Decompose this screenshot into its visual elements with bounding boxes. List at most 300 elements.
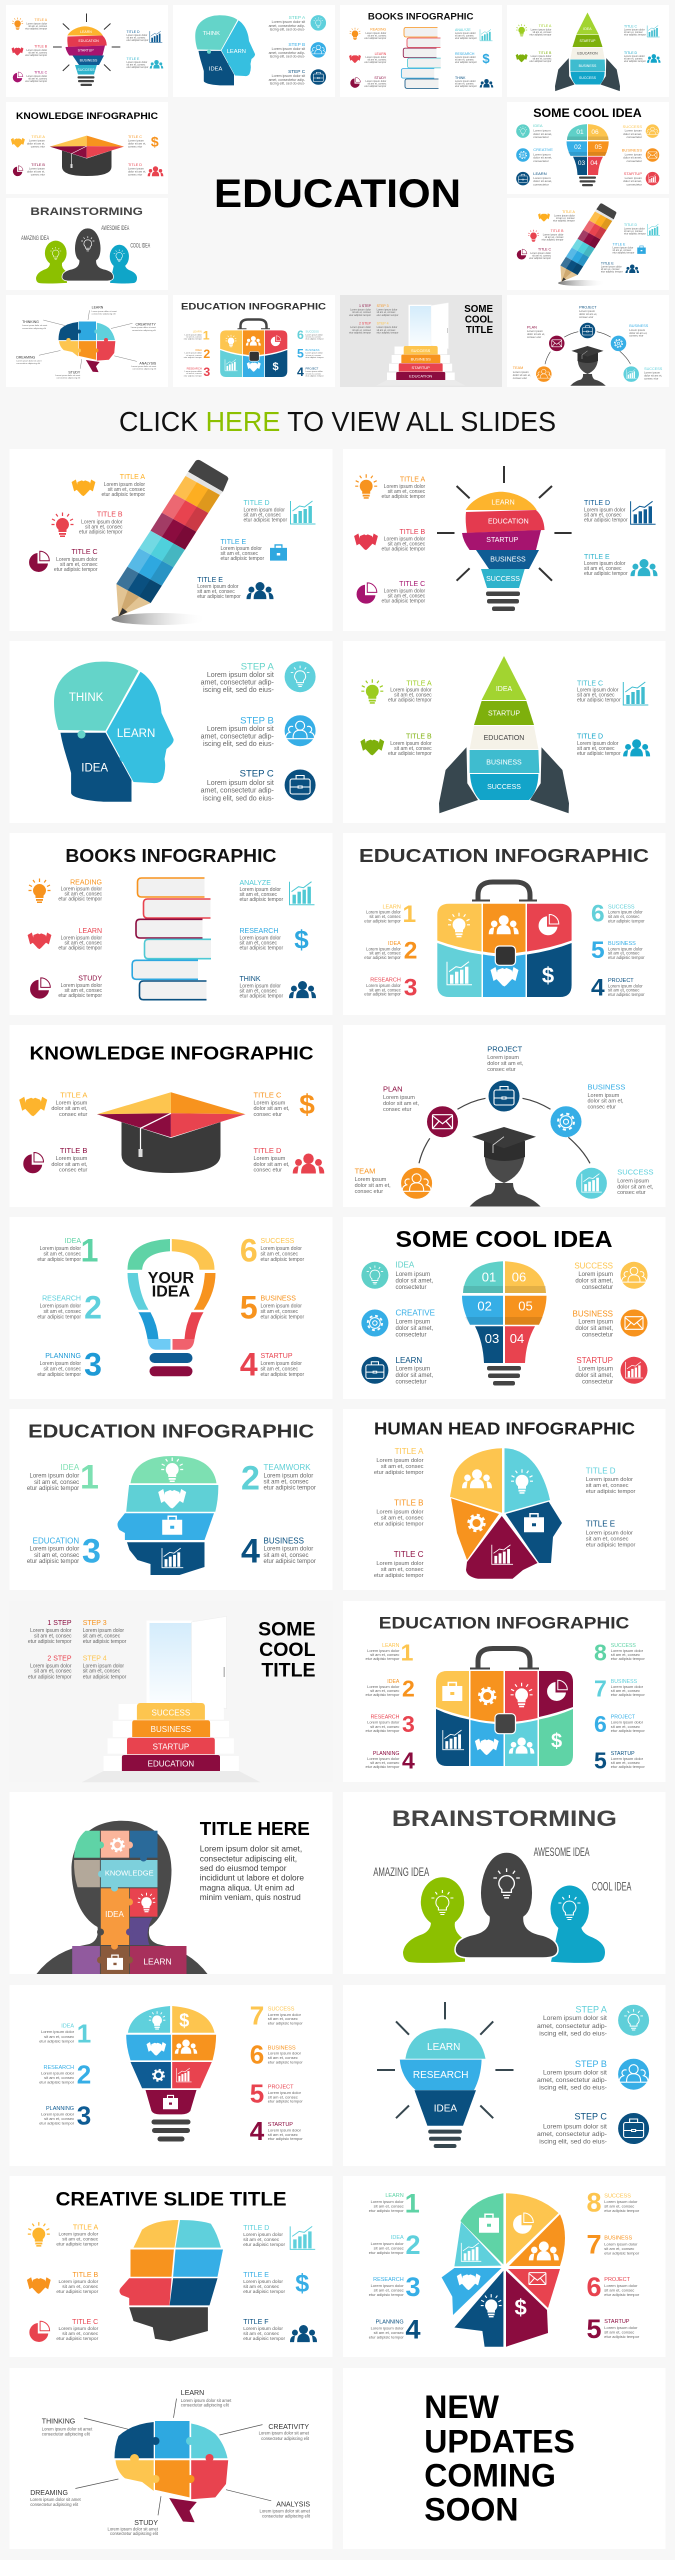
rocket illustration: SUCCESS <box>487 784 521 791</box>
text block: step 4: sit am et, consec <box>83 1669 121 1675</box>
bulb ring illustration <box>128 1239 216 1376</box>
briefcase illustration: $ <box>551 1730 562 1752</box>
text block: title C: sit am et, consec <box>62 2331 99 2337</box>
text block: research 2: RESEARCH <box>42 1296 81 1303</box>
bulb illustration <box>437 466 572 611</box>
text block: title D: Lorem ipsum dolor <box>243 2232 283 2238</box>
text block: success: Lorem ipsum <box>617 1178 649 1184</box>
text block: title D: dolor sit am et, <box>254 1162 290 1168</box>
text block: think: Lorem ipsum dolor <box>240 983 281 989</box>
heading: CREATIVE SLIDE TITLE <box>56 2190 287 2210</box>
panel: books slide <box>10 833 332 1015</box>
numbered bulb illustration: 02 <box>477 1299 492 1314</box>
text block: research 2: 2 <box>77 2060 91 2090</box>
text block: business 5: BUSINESS <box>608 941 636 947</box>
icon: dollar: $ <box>299 1089 315 1120</box>
text block: title E: etur adipisic tempor <box>220 556 264 562</box>
text block: think: etur adipisic tempor <box>240 993 283 999</box>
text block: success: consectetur <box>582 1285 613 1291</box>
text block: thinking: consectetur adipiscing elit <box>42 2432 91 2437</box>
text block: project: Lorem ipsum <box>487 1055 519 1061</box>
icon: bulb <box>52 512 74 537</box>
text block: title A: etur adipisic tempor <box>374 1470 424 1476</box>
text block: idea 2: etur adipisic tempor <box>364 955 401 960</box>
text block: title B: Lorem ipsum dolor <box>376 1510 424 1516</box>
bulb illustration: SUCCESS <box>486 576 520 583</box>
text block: startup 4: etur adipisic tempor <box>268 2136 303 2141</box>
text block: success 7 <box>250 2000 303 2030</box>
text block: title D: sit am et, consec <box>584 512 622 518</box>
segmented head illustration <box>120 2220 223 2341</box>
text block: title C: sit am et, consec <box>577 693 615 699</box>
text block: project 4 <box>591 974 645 1001</box>
connecting arcs <box>419 1098 590 1163</box>
text block: title B: etur adipisic tempor <box>79 530 123 536</box>
puzzle person illustration: IDEA <box>105 1910 124 1919</box>
panel: knowledge slide <box>10 1025 332 1207</box>
text block: title B: etur adipisic tempor <box>388 751 432 757</box>
text block: plan: Lorem ipsum <box>383 1095 415 1101</box>
numbered bulb illustration: 03 <box>485 1331 499 1346</box>
text block: business 7: 7 <box>586 2230 602 2260</box>
text block: research 3 <box>369 2272 421 2302</box>
text block: project 4: etur adipisic tempor <box>608 992 645 997</box>
text block: title D: sit am et, consec <box>243 2237 280 2243</box>
icon: pie chart <box>357 583 377 604</box>
text block: startup 4 <box>250 2116 303 2146</box>
text block: project 6: sit am et, consec <box>604 2287 634 2292</box>
text block: startup: dolor sit amet, <box>575 1373 613 1379</box>
text block: idea 1: 1 <box>77 2018 91 2048</box>
heading: EDUCATION INFOGRAPHIC <box>359 845 649 866</box>
text block: research 3: RESEARCH <box>370 978 401 984</box>
panel: bulb slide <box>343 449 666 631</box>
text block: startup 4: sit am et, consec <box>260 1366 299 1372</box>
thumbnail: bulb slide <box>6 5 168 97</box>
numbered bulb illustration: 05 <box>518 1299 533 1314</box>
panel: brain slide <box>10 2368 332 2549</box>
text block: research 3: sit am et, consec <box>374 2288 404 2292</box>
text block: title B: etur adipisic tempor <box>374 1522 424 1528</box>
text block: title C: Lorem ipsum <box>254 1100 286 1106</box>
text block: study: STUDY <box>134 2520 158 2527</box>
panel: creative slide <box>10 2176 332 2357</box>
panel: some cool idea slide <box>343 1217 666 1399</box>
text block: education 3: 3 <box>82 1533 101 1571</box>
text block: teamwork 2: 2 <box>241 1459 260 1497</box>
text block: title A: etur adipisic tempor <box>56 2242 99 2248</box>
text block: idea 1: 1 <box>81 1232 98 1268</box>
text block: project: PROJECT <box>487 1045 523 1054</box>
text block: step B: STEP B <box>575 2059 607 2069</box>
text block: planning 3: Lorem ipsum dolor <box>40 1361 81 1367</box>
text block: title E: etur adipisic tempor <box>243 2289 285 2295</box>
text block: learn 1: LEARN <box>385 2193 404 2199</box>
text block: business 4 <box>241 1533 316 1571</box>
text block: title D: sit am et, consec <box>244 512 282 518</box>
text block: title E: TITLE E <box>243 2272 269 2279</box>
heading: new updates coming soon: COMING <box>424 2457 556 2493</box>
text block: analyze: ANALYZE <box>240 880 271 887</box>
text block: learn 1: 1 <box>405 2188 420 2218</box>
text block: step B: STEP B <box>240 715 274 726</box>
text block: step 4: Lorem ipsum dolor <box>83 1663 124 1669</box>
label: cool idea: COOL IDEA <box>592 1880 631 1894</box>
text block: idea 2: etur adipisic tempor <box>365 1692 400 1697</box>
text block: idea 1: etur adipisic tempor <box>39 2038 75 2043</box>
text block: project 6: PROJECT <box>604 2277 631 2283</box>
text block: planning 4: Lorem ipsum dolor <box>367 1756 400 1761</box>
text block: title C: TITLE C <box>577 681 603 688</box>
thumbnail: knowledge slide <box>6 102 168 194</box>
text block: startup 5: sit am et, consec <box>611 1760 640 1765</box>
text block: planning 4: PLANNING <box>373 1751 399 1757</box>
icon: pie chart <box>29 2321 50 2342</box>
text block: project 6: etur adipisic tempor <box>604 2292 640 2297</box>
text block: idea 2: sit am et, consec <box>370 1688 399 1693</box>
text block: business 7: 7 <box>594 1675 607 1701</box>
text block: learn 1: Lorem ipsum dolor <box>367 1648 400 1653</box>
text block: step 3: etur adipisic tempor <box>83 1639 127 1645</box>
text block: research 3: 3 <box>402 1711 415 1737</box>
rocket illustration <box>439 656 569 813</box>
text block: success 6 <box>240 1232 304 1268</box>
panel: three step bulb slide <box>343 1985 666 2166</box>
text block: startup 5: sit am et, consec <box>604 2329 634 2334</box>
text block: research 3: sit am et, consec <box>369 987 401 992</box>
text block: step C: iscing elit, sed do eius- <box>539 2139 607 2146</box>
text block: project 6: sit am et, consec <box>611 1724 640 1729</box>
text block: planning 3: etur adipisic tempor <box>37 1372 81 1378</box>
text block: planning 3: Lorem ipsum dolor <box>41 2112 75 2116</box>
text block: body: incididunt ut labore et dolore <box>200 1873 304 1883</box>
text block: study: consectetur adipiscing elit <box>110 2531 159 2536</box>
text block: title B: sit am et, consec <box>85 525 123 531</box>
text block: research 2: Lorem ipsum dolor <box>41 2070 75 2076</box>
heading: EDUCATION INFOGRAPHIC <box>28 1420 314 1441</box>
text block: title D: etur adipisic tempor <box>584 517 628 523</box>
numbered bulb illustration: 06 <box>512 1269 526 1284</box>
panel: puzzle person slide <box>10 1792 332 1974</box>
graduation cap illustration <box>97 1092 246 1173</box>
text block: research 2 <box>37 1290 102 1326</box>
icon: dark head <box>455 1852 558 1958</box>
text block: idea 1: sit am et, consec <box>34 1480 79 1486</box>
text block: title A: Lorem ipsum dolor <box>58 2232 99 2238</box>
text block: title D: TITLE D <box>243 2225 269 2232</box>
text block: business 7: etur adipisic tempor <box>604 2250 640 2255</box>
text block: step C: iscing elit, sed do eius- <box>203 795 274 802</box>
text block: reading: READING <box>70 879 102 886</box>
heading: TITLE HERE <box>200 1819 310 1839</box>
text block: success 8 <box>586 2188 640 2218</box>
door and stairs illustration: BUSINESS <box>151 1725 191 1734</box>
text block: idea 1: Lorem ipsum dolor <box>40 1246 81 1252</box>
door and stairs illustration: EDUCATION <box>148 1759 194 1768</box>
text block: startup 5: etur adipisic tempor <box>604 2334 640 2339</box>
text block: title B: TITLE B <box>73 2272 99 2279</box>
text block: title B: Lorem ipsum dolor <box>384 536 426 542</box>
panel: education head slide <box>10 1409 332 1590</box>
text block: success 6: etur adipisic tempor <box>608 918 645 923</box>
text block: plan: dolor sit am et, <box>383 1101 420 1107</box>
text block: step B: amet, consectetur adip- <box>201 734 274 740</box>
text block: title B: TITLE B <box>406 734 432 741</box>
text block: title C: etur adipisic tempor <box>56 2336 99 2342</box>
text block: title B: sit am et, consec <box>388 542 426 548</box>
text block: education 3 <box>27 1533 101 1571</box>
text block: learn: LEARN <box>181 2390 204 2397</box>
text block: project 6: etur adipisic tempor <box>611 1728 645 1733</box>
text block: project 6: Lorem ipsum dolor <box>611 1720 644 1725</box>
text block: title C: Lorem ipsum dolor <box>376 1561 424 1567</box>
text block: step C: STEP C <box>240 769 274 780</box>
text block: research 3: 3 <box>404 974 417 1001</box>
text block: business: dolor sit amet, <box>575 1326 613 1332</box>
panel: seven item bulb slide <box>10 1985 332 2166</box>
text block: success 6: SUCCESS <box>608 904 635 910</box>
bulb illustration: BUSINESS <box>490 557 526 564</box>
text block: title B: sit am et, consec <box>62 2284 99 2290</box>
text block: title B: consec etur <box>59 1168 88 1174</box>
text block: thinking: THINKING <box>42 2418 75 2426</box>
text block: title B: etur adipisic tempor <box>56 2289 99 2295</box>
text block: research 3: etur adipisic tempor <box>369 2292 404 2297</box>
text block: thinking: Lorem ipsum dolor sit amet <box>42 2426 93 2431</box>
icon: bulb <box>28 2222 50 2247</box>
text block: business: consectetur <box>582 1333 613 1339</box>
text block: planning 3: 3 <box>77 2101 91 2131</box>
text block: startup: Lorem ipsum <box>578 1367 613 1373</box>
text block: research 2 <box>39 2060 91 2090</box>
icon: bulb circle <box>618 2005 649 2036</box>
text block: business 7: BUSINESS <box>611 1679 638 1685</box>
text block: business 6: BUSINESS <box>268 2045 296 2051</box>
text block: success 6: Lorem ipsum dolor <box>608 910 643 915</box>
icon: people <box>630 559 658 576</box>
text block: idea 2: sit am et, consec <box>369 951 401 956</box>
text block: startup 5: STARTUP <box>604 2319 630 2325</box>
icon: pie chart <box>23 1152 44 1173</box>
icon: handshake <box>72 480 95 496</box>
text block: project 4: PROJECT <box>608 978 634 984</box>
text block: learn: Lorem ipsum dolor sit amet <box>181 2398 232 2403</box>
text block: idea 1: etur adipisic tempor <box>37 1257 81 1263</box>
text block: business 5: 5 <box>240 1290 258 1326</box>
icon: project briefcase circle <box>488 1080 520 1112</box>
text block: teamwork 2: sit am et, consec <box>264 1479 309 1485</box>
text block: step B: iscing elit, sed do eius- <box>203 741 274 748</box>
thumbnail: books slide <box>340 5 502 97</box>
thumbnail: stairs slide <box>340 295 502 387</box>
text block: title D: Lorem ipsum dolor <box>577 741 619 747</box>
heading: COOL <box>259 1639 316 1661</box>
brain puzzle illustration <box>114 2421 228 2522</box>
text block: title A: sit am et, consec <box>62 2237 99 2243</box>
text block: learn 1 <box>364 901 416 928</box>
text block: title A: Lorem ipsum dolor <box>390 688 432 694</box>
text block: project 6 <box>586 2272 640 2302</box>
text block: step B: amet, consectetur adip- <box>537 2077 607 2084</box>
text block: learn: LEARN <box>396 1356 422 1365</box>
text block: startup 5: STARTUP <box>611 1751 635 1757</box>
text block: education 3: etur adipisic tempor <box>27 1559 79 1565</box>
text block: title C: Lorem ipsum dolor <box>58 2326 99 2332</box>
text block: body: minim veniam, quis nostrud <box>200 1892 301 1902</box>
text block: success 6: etur adipisic tempor <box>260 1257 304 1263</box>
text block: title B: sit am et, consec <box>394 746 432 752</box>
text block: planning 4 <box>369 2314 421 2344</box>
icon: plan mail circle <box>427 1106 458 1137</box>
text block: 2 step: sit am et, consec <box>34 1669 72 1675</box>
text block: learn 1: LEARN <box>382 1643 400 1649</box>
text block: title E: TITLE E <box>584 554 610 561</box>
heading: new updates coming soon: SOON <box>424 2492 519 2528</box>
text block: teamwork 2: etur adipisic tempor <box>264 1486 316 1492</box>
text block: learn 1: 1 <box>402 901 416 928</box>
text block: title D: TITLE D <box>244 500 270 507</box>
icon: bulb <box>355 474 377 499</box>
bulb ring illustration: IDEA <box>152 1283 190 1300</box>
text block: creativity: CREATIVITY <box>268 2424 309 2431</box>
text block: reading: etur adipisic tempor <box>58 897 102 903</box>
text block: 1 step: sit am et, consec <box>34 1633 72 1639</box>
text block: title C: sit am et, consec <box>388 594 426 600</box>
text block: learn: Lorem ipsum <box>396 1367 430 1373</box>
text block: teamwork 2: TEAMWORK <box>264 1463 311 1472</box>
icon: learn briefcase circle <box>361 1357 388 1384</box>
text block: title B: Lorem ipsum <box>56 1156 88 1162</box>
text block: title D: TITLE D <box>586 1466 616 1475</box>
text block: body: magna aliqua. Ut enim ad <box>200 1882 295 1892</box>
text block: learn: consectetur <box>396 1380 427 1386</box>
text block: title D: TITLE D <box>254 1146 282 1155</box>
thumbnail: pencil slide <box>507 198 669 290</box>
text block: success 8: 8 <box>594 1639 607 1665</box>
heading: HUMAN HEAD INFOGRAPHIC <box>374 1418 635 1438</box>
text block: title C: TITLE C <box>71 549 98 556</box>
text block: title C: TITLE C <box>72 2319 98 2326</box>
text block: creative: dolor sit amet, <box>396 1326 434 1332</box>
text block: learn 1: Lorem ipsum dolor <box>366 910 401 915</box>
title: EDUCATION: EDUCATION <box>214 172 461 216</box>
text block: idea 1: IDEA <box>61 1463 80 1472</box>
text block: success 8 <box>594 1639 645 1665</box>
text block: success: SUCCESS <box>617 1168 653 1177</box>
text block: business: BUSINESS <box>588 1082 625 1091</box>
text block: title A: Lorem ipsum dolor <box>104 482 145 488</box>
text block: title B: TITLE B <box>97 512 123 519</box>
pencil illustration <box>112 460 228 625</box>
text block: idea 2 <box>365 1675 415 1701</box>
icon: briefcase <box>270 545 287 561</box>
text block: business 6: sit am et, consec <box>268 2055 298 2060</box>
icon: blue head <box>550 1886 605 1963</box>
text block: business 5: etur adipisic tempor <box>260 1315 304 1321</box>
text block: title A: Lorem ipsum dolor <box>376 1458 424 1464</box>
text block: idea: IDEA <box>396 1260 415 1269</box>
text block: planning 3: PLANNING <box>46 2106 74 2112</box>
text block: title B: Lorem ipsum dolor <box>390 741 432 747</box>
text block: creative: consectetur <box>396 1333 427 1339</box>
text block: title F: etur adipisic tempor <box>243 2336 285 2342</box>
text block: project: consec etur <box>487 1067 516 1073</box>
text block: step A: iscing elit, sed do eius- <box>203 687 274 694</box>
text block: title D: consec etur <box>254 1168 282 1174</box>
text block: step B: Lorem ipsum dolor sit <box>543 2070 607 2077</box>
text block: research 3: Lorem ipsum dolor <box>366 983 401 988</box>
text block: title A: etur adipisic tempor <box>382 494 426 500</box>
text block: learn 1: 1 <box>401 1639 414 1665</box>
text block: business: Lorem ipsum <box>578 1320 613 1326</box>
text block: title C: TITLE C <box>394 1550 424 1559</box>
text block: title A: TITLE A <box>60 1090 87 1099</box>
text block: step C: amet, consectetur adip- <box>537 2131 607 2138</box>
text block: project 5 <box>250 2078 303 2108</box>
text block: research 2: 2 <box>84 1290 102 1326</box>
text block: success 8: Lorem ipsum dolor <box>611 1648 644 1653</box>
icon: pie chart <box>30 978 50 999</box>
briefcase illustration: $ <box>542 963 554 988</box>
text block: learn 1: sit am et, consec <box>370 1652 399 1657</box>
text block: title A: sit am et, consec <box>381 1464 424 1470</box>
text block: idea 2: 2 <box>402 1675 415 1701</box>
text block: title B: etur adipisic tempor <box>382 546 426 552</box>
icon: people <box>623 739 650 756</box>
text block: title A: TITLE A <box>400 476 426 483</box>
icon: bulb <box>361 679 383 704</box>
text block: idea 1 <box>27 1459 99 1497</box>
text block: 2 step: etur adipisic tempor <box>28 1674 72 1680</box>
panel: eight cell briefcase slide <box>343 1601 666 1782</box>
text block: learn 1: Lorem ipsum dolor <box>371 2199 404 2204</box>
text block: project 5: Lorem ipsum dolor <box>268 2090 302 2095</box>
text block: title C: sit am et, consec <box>60 562 98 568</box>
text block: research 2: sit am et, consec <box>44 2075 74 2080</box>
text block: 2 step: Lorem ipsum dolor <box>30 1663 72 1669</box>
text block: title C: etur adipisic tempor <box>54 567 98 573</box>
text block: title A: Lorem ipsum dolor <box>384 484 426 490</box>
text block: business 5 <box>240 1290 304 1326</box>
text block: title A: sit am et, consec <box>108 487 146 493</box>
text block: research 3 <box>364 974 417 1001</box>
text block: idea 2: 2 <box>404 938 417 965</box>
text block: success: dolor sit am et, <box>617 1184 654 1190</box>
text block: business 6: Lorem ipsum dolor <box>268 2051 302 2056</box>
text block: plan: PLAN <box>383 1085 403 1094</box>
text block: idea 1: 1 <box>80 1459 99 1497</box>
head puzzle illustration: IDEA <box>81 763 108 775</box>
heading: EDUCATION INFOGRAPHIC <box>379 1614 629 1633</box>
text block: business 5: BUSINESS <box>260 1296 296 1303</box>
text block: step B: iscing elit, sed do eius- <box>539 2084 607 2092</box>
text block: research 3: etur adipisic tempor <box>364 992 401 997</box>
icon: step B people circle <box>285 715 316 746</box>
text block: project 5: 5 <box>250 2078 264 2108</box>
heading: BOOKS INFOGRAPHIC <box>65 845 276 866</box>
text block: business 7: sit am et, consec <box>604 2246 634 2251</box>
text block: body: Lorem ipsum dolor sit amet, <box>200 1844 302 1854</box>
text block: project 4: Lorem ipsum dolor <box>608 983 643 988</box>
text block: title D: etur adipisic tempor <box>586 1489 636 1495</box>
text block: research 3: Lorem ipsum dolor <box>371 2283 404 2288</box>
text block: title E: sit am et, consec <box>586 1536 629 1542</box>
panel: education briefcase slide <box>343 833 666 1015</box>
text block: learn: Lorem ipsum dolor <box>61 935 102 941</box>
text block: 1 step: etur adipisic tempor <box>28 1639 72 1645</box>
text block: title D: sit am et, consec <box>577 746 615 752</box>
stack of books <box>132 878 211 1000</box>
